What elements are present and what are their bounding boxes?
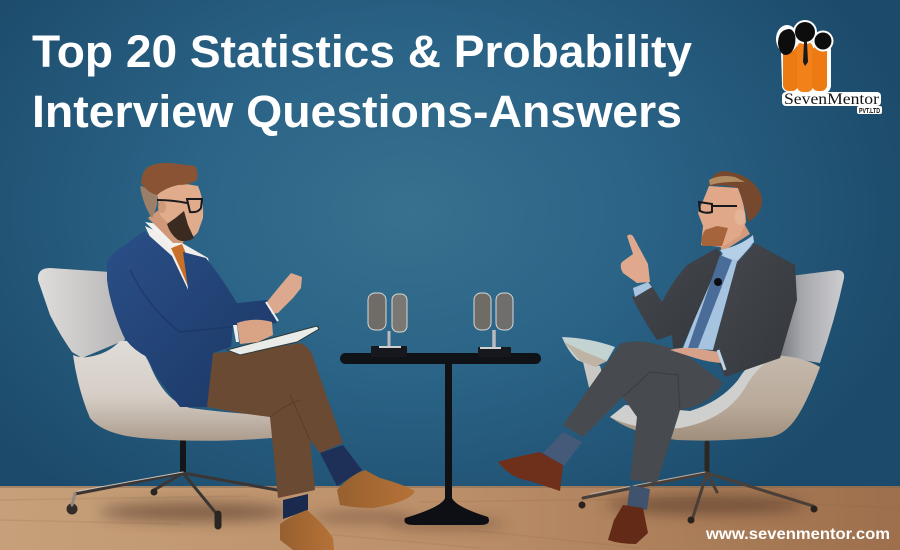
blue tie: [688, 255, 732, 348]
notebook: [562, 337, 615, 367]
raised cuff: [633, 282, 652, 297]
collar: [720, 235, 754, 260]
logo: SevenMentor: [776, 20, 882, 115]
beard: [167, 211, 194, 241]
neck: [720, 225, 750, 252]
floor shadows: [100, 496, 805, 528]
website url: www.sevenmentor.com: [705, 526, 890, 543]
right chair inner lip: [610, 354, 774, 429]
logo wordmark: SevenMentor: [784, 91, 880, 108]
left man: [107, 163, 415, 550]
table top: [340, 353, 541, 364]
orange tie: [171, 244, 213, 323]
sleeve crease: [130, 270, 232, 332]
shirt cuff: [233, 325, 239, 342]
trouser crease: [270, 395, 310, 440]
table base: [404, 498, 489, 525]
ear: [158, 201, 166, 213]
lap hand: [670, 348, 722, 363]
right chair base: [578, 443, 818, 524]
light blue shirt: [683, 245, 752, 350]
shoe lower: [608, 505, 648, 544]
raised hand: [267, 273, 302, 314]
hair: [709, 171, 762, 222]
left chair base: [66, 442, 277, 526]
collar: [145, 222, 182, 248]
raised cuff: [266, 302, 278, 321]
table: [340, 353, 541, 525]
left chair back: [38, 268, 125, 358]
glasses: [157, 199, 202, 212]
shoe upper: [498, 452, 563, 491]
right chair back: [760, 270, 844, 363]
sock upper: [543, 432, 582, 466]
ear: [734, 209, 746, 225]
right microphone: [474, 293, 513, 357]
glasses: [699, 202, 737, 213]
right chair: [578, 270, 844, 524]
side hair fade: [140, 186, 158, 218]
shoe upper: [337, 470, 415, 508]
logo wordmark: PVT.LTD: [859, 108, 880, 115]
neck: [148, 205, 190, 243]
grey jacket body: [713, 243, 797, 377]
trousers: [563, 341, 723, 483]
right chair arm: [583, 362, 610, 400]
grey sleeve: [632, 248, 722, 348]
right chair shell: [610, 355, 820, 441]
raised hand: [621, 234, 650, 283]
shoe lower: [280, 510, 334, 550]
lapel microphone: [714, 278, 722, 286]
title: Top 20 Statistics & Probability: [32, 26, 693, 77]
left chair shell: [73, 341, 272, 441]
lower hand: [237, 320, 273, 344]
white shirt: [145, 226, 222, 325]
title: [32, 26, 693, 137]
table pole: [445, 364, 452, 500]
beard: [701, 226, 728, 246]
trousers: [207, 343, 343, 498]
sock lower: [627, 485, 650, 510]
left microphone: [368, 293, 407, 357]
trouser crease: [623, 372, 680, 410]
sock lower: [283, 494, 308, 519]
face: [157, 183, 203, 240]
hair: [141, 163, 198, 195]
notebook: [227, 326, 319, 355]
wooden floor: [0, 486, 900, 550]
left chair: [38, 268, 277, 526]
right man: [498, 171, 797, 544]
logo figures: [776, 20, 834, 94]
notebook underside: [564, 342, 607, 367]
hair highlight: [709, 176, 745, 185]
title: Interview Questions-Answers: [32, 86, 682, 137]
lap cuff: [718, 350, 725, 370]
face: [698, 186, 746, 247]
logo wordmark: [782, 91, 882, 115]
sock upper: [320, 445, 362, 486]
blue jacket: [107, 231, 277, 407]
